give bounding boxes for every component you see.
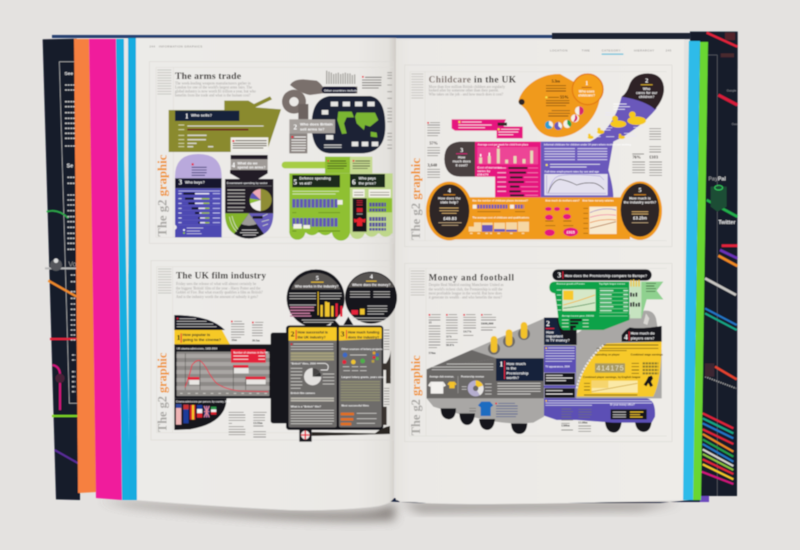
back cover: left side with metro map <box>43 39 80 500</box>
section: how does the Premiership compare to Europe: Average income game, 2003/04 <box>562 315 595 318</box>
top navigation <box>550 49 672 55</box>
section: how important is TV money <box>544 318 655 431</box>
section: defence spending vs aid: Defence spending <box>299 177 331 181</box>
intro: looked after by someone other than their parent. <box>429 89 499 93</box>
section: how much does it cost: much does <box>452 160 471 164</box>
coloured page edges: right green <box>693 42 708 500</box>
section: how popular is going to the cinema: How popular is <box>183 333 210 337</box>
camera body with panels 2 and 3: 2 <box>291 330 295 339</box>
notes around cinema panel <box>229 321 389 437</box>
section: how much do players earn: Combined wage earnings <box>631 352 663 356</box>
vertical label: The g2 graphic <box>409 157 423 240</box>
section: who buys: 3 <box>179 179 183 187</box>
section: state help and industry worth: £915 <box>567 231 575 235</box>
back cover: left side with metro map: See <box>64 71 73 77</box>
section: how much do players earn: players earn? <box>631 336 655 340</box>
section: state help and industry worth: Has the number of childcare places increased? <box>472 200 528 203</box>
camera body with panels 2 and 3: "British" films, 2004 <box>291 362 316 366</box>
section: how much does it cost: Average cost per week for child from place <box>478 143 529 146</box>
intro: benefits from the trade and what is the human cost? <box>175 93 251 97</box>
section: how much do players earn: 414175 <box>596 363 624 372</box>
notes: £4.7% <box>463 329 472 333</box>
section: defence spending vs aid: Who pays <box>359 177 376 181</box>
section: who buys <box>175 154 222 237</box>
section: how much is the Premiership worth: 1 <box>499 360 503 369</box>
section: how popular is going to the cinema <box>174 315 271 430</box>
section: who uses childcare (duck body): 1 <box>585 80 588 87</box>
section: how important is TV money: is TV money? <box>546 338 571 342</box>
side notes: 57% <box>429 140 438 145</box>
back cover: right side with metro map: Goo <box>732 122 738 126</box>
film reels: 5 <box>316 275 319 282</box>
section: how important is TV money: 2 <box>546 319 550 328</box>
section: how popular is going to the cinema: Cinema admissions per person, by country, 2004 <box>176 400 231 403</box>
page header left: 244 INFORMATION GRAPHICS <box>149 45 203 49</box>
camera body with panels 2 and 3 <box>271 325 392 430</box>
film reels: 4 <box>370 274 374 281</box>
intro: Friday sees the release of what will almost certainly be <box>176 282 257 286</box>
back cover: right side with metro map: PayPal <box>708 177 726 183</box>
section: how much does it cost: it cost? <box>455 164 468 168</box>
page edge white gap <box>124 39 130 499</box>
intro: The week-leading weapons manufacturers gather in <box>175 81 251 85</box>
section: who cares for our children: children? <box>639 95 655 99</box>
camera body with panels 2 and 3: Other sources of lottery projects <box>341 347 383 351</box>
notes: £600,000 <box>481 321 494 325</box>
section: who cares for our children: 2 <box>645 78 648 85</box>
panel: arms trade <box>149 45 393 243</box>
intro: it generate its wealth - and who benefits the most? <box>429 296 502 300</box>
section: what do we spend on arms <box>225 155 273 239</box>
section: who does Britain sell arms to <box>282 71 392 153</box>
ribbon callouts <box>452 119 523 138</box>
vertical label: The g2 graphic <box>156 352 170 432</box>
camera body with panels 2 and 3: 3 <box>341 330 345 339</box>
notes <box>429 314 496 355</box>
coloured page edges: orange <box>74 39 97 493</box>
left page <box>136 38 396 510</box>
section: who does Britain sell arms to: 2 <box>293 122 297 131</box>
section: how much is the Premiership worth: Premiership <box>506 371 529 375</box>
back cover: left side with metro map: Se <box>67 163 73 169</box>
section: who cares for our children <box>541 73 664 197</box>
section: who buys: Who buys? <box>185 180 205 184</box>
panel: money and football <box>405 263 672 442</box>
section: state help and industry worth: the industry worth? <box>624 201 656 205</box>
coloured page edges: right blue <box>683 41 700 500</box>
intro: Who takes on the job - and how much does it cost? <box>429 93 504 97</box>
intro: London for one of the world's largest arms fairs. The <box>175 85 252 89</box>
coloured page edges: pink <box>89 39 122 500</box>
side notes <box>427 122 662 177</box>
side notes: 76% <box>632 155 641 160</box>
camera body with panels 2 and 3: How much funding <box>348 331 379 335</box>
section: how popular is going to the cinema: going to the cinema? <box>183 338 222 342</box>
coloured page edges: second blue <box>128 38 137 500</box>
section: who sells <box>169 96 281 152</box>
right page <box>396 40 684 504</box>
section: state help and industry worth: The average cost of childcare and qualifications <box>472 217 530 220</box>
side notes: 3,640 <box>427 162 437 167</box>
section: how much is the Premiership worth <box>428 358 543 397</box>
intro: And is the industry worth the amount of subsidy it gets? <box>176 295 258 299</box>
section: how important is TV money: How <box>546 330 554 334</box>
section: defence spending vs aid: 5 <box>293 177 297 186</box>
section: who uses childcare (duck body) <box>518 74 603 137</box>
section: how much does it cost: How <box>458 156 466 160</box>
intro: More than five million British children are regularly <box>429 85 505 89</box>
intro: global industry is now worth $1 trillion a year, but who <box>175 89 256 94</box>
camera body with panels 2 and 3: the UK industry? <box>298 335 326 339</box>
section: who does Britain sell arms to: sell arms to? <box>300 126 325 131</box>
section: what do we spend on arms: Government spending by sector <box>227 181 267 185</box>
top navigation: LOCATION <box>550 49 568 53</box>
section: who uses childcare (duck body): Who uses <box>579 89 595 93</box>
section: what do we spend on arms: 4 <box>232 161 236 169</box>
title: Childcare in the UK <box>429 75 517 85</box>
section: what do we spend on arms: spend on arms? <box>237 166 266 170</box>
section: how does the Premiership compare to Europe: How does the Premiership compare to Europe? <box>565 274 648 278</box>
section: who cares for our children: Informal childcare for children under 14 years where mothers are working <box>544 143 631 146</box>
intro: most profitable league in the world. But how does <box>429 291 502 295</box>
section: how does the Premiership compare to Europe: Revenue growth of Premier <box>557 283 585 286</box>
vertical label: The g2 graphic <box>156 154 170 237</box>
section: how much does it cost: varies by <box>477 169 491 173</box>
section: how much does it cost: Cost of nurseries <box>477 165 502 169</box>
camera body with panels 2 and 3: Largest lottery grants, years since 2003 <box>341 375 392 379</box>
top navigation: HIERARCHY <box>634 49 655 53</box>
camera body with panels 2 and 3: How successful is <box>298 331 328 335</box>
section: how important is TV money: Or your money office? <box>610 404 635 406</box>
camera body with panels 2 and 3: British film cameos <box>291 391 316 395</box>
section: how popular is going to the cinema: 1 <box>177 333 181 342</box>
intro: the biggest 'British' film of the year - Harry Potter and the <box>176 286 261 290</box>
notes: 15 <box>429 321 432 325</box>
section: how important is TV money: important <box>546 334 564 338</box>
intro: the world's richest club, the Premiership is still the <box>429 287 503 292</box>
section: how much is the Premiership worth: How much <box>506 362 526 366</box>
section: defence spending vs aid: the price? <box>359 181 377 185</box>
notes: 11% <box>446 334 452 338</box>
camera body with panels 2 and 3: What is a "British" film? <box>291 405 321 409</box>
section: who cares for our children: Who <box>643 87 650 91</box>
section: how much do players earn: Combined player earnings, by English league <box>583 375 641 379</box>
section: how much is the Premiership worth: Average club revenue, <box>429 375 454 378</box>
section: defence spending vs aid: 6 <box>352 177 356 186</box>
film reels <box>287 269 397 327</box>
notes: 50.8% <box>446 343 454 347</box>
back cover: left side with metro map: Vo <box>68 262 77 269</box>
camera handle and bottom bar <box>299 350 391 442</box>
section: how much is the Premiership worth: worth? <box>505 376 520 380</box>
section: state help and industry worth: How have nursery salaries <box>582 199 614 202</box>
back cover: right side with metro map: Google <box>727 89 737 93</box>
section: how much do players earn: How much do <box>631 332 655 336</box>
top navigation: CATEGORY <box>602 49 621 53</box>
intro: Despite Real Madrid ousting Manchester United as <box>429 283 504 287</box>
section: state help and industry worth: £49.83 <box>443 216 457 221</box>
notes around cinema panel: 35m <box>231 338 237 342</box>
camera body with panels 2 and 3: does the industry? <box>348 335 379 339</box>
section: state help and industry worth: How does the <box>438 197 461 201</box>
notes around cinema panel: 39.5m <box>252 338 260 342</box>
section: state help and industry worth <box>426 181 662 240</box>
vertical label: The g2 graphic <box>409 355 423 435</box>
section: how important is TV money: TV appearances, 2004 <box>545 366 570 369</box>
section: how does the Premiership compare to Europe <box>549 269 663 330</box>
intro: Goblet of Fire. But what exactly qualifies a film as British? <box>176 291 263 295</box>
side notes: £103 <box>649 155 659 160</box>
panel: the UK film industry <box>151 261 397 442</box>
section: who uses childcare (duck body): childcare? <box>578 93 595 97</box>
section: how much do players earn <box>577 326 663 395</box>
back cover: right side with metro map: Twitter <box>718 220 735 226</box>
section: state help and industry worth: 4 <box>448 188 452 195</box>
section: state help and industry worth: How much is <box>629 197 651 201</box>
section: how does the Premiership compare to Europe: 3 <box>557 271 561 280</box>
boot cleats <box>441 408 652 434</box>
title: Money and football <box>429 273 514 283</box>
section: how much do players earn: Spending on player <box>595 352 620 356</box>
section: how important is TV money: £300m <box>561 424 570 428</box>
section: who uses childcare (duck body): 5.3m <box>552 79 561 84</box>
section: what do we spend on arms: What do we <box>237 161 258 165</box>
back cover: right side with metro map <box>690 32 738 496</box>
notes: 570m <box>429 351 436 355</box>
camera body with panels 2 and 3: Most successful films <box>341 404 369 408</box>
football shirt and stud callouts <box>469 402 518 417</box>
section: how much does it cost: 3 <box>460 147 463 154</box>
panel: childcare in the UK <box>405 49 672 247</box>
section: how much do players earn: 4 <box>624 332 628 341</box>
section: state help and industry worth: state help? <box>440 201 459 205</box>
section: how much is the Premiership worth: Premiership revenue <box>461 376 485 378</box>
top navigation: TIME <box>582 49 590 53</box>
section: how popular is going to the cinema: UK cinema admissions, 1933-2004 <box>177 348 218 351</box>
book spine edge and top of cover <box>52 33 709 503</box>
section: state help and industry worth: 5 <box>638 187 642 194</box>
section: how much does it cost <box>444 142 541 197</box>
section: who sells: Who sells? <box>191 112 213 117</box>
top navigation: 245 <box>666 49 672 53</box>
section: defence spending vs aid: vs aid? <box>299 181 313 185</box>
title: The UK film industry <box>176 271 266 281</box>
notes around cinema panel: £3.55m <box>253 421 263 425</box>
section: how popular is going to the cinema: Number of cinemas in the UK <box>233 352 268 355</box>
section: how does the Premiership compare to Europe: Top-flight league revenue <box>599 283 626 286</box>
section: how much is the Premiership worth: is the <box>506 367 516 371</box>
book shadow <box>100 500 680 521</box>
section: who does Britain sell arms to: Who does Britain <box>300 121 333 126</box>
section: who does Britain sell arms to: Other countries include <box>324 88 358 92</box>
section: who cares for our children: Full-time employment rates by sex and age <box>545 169 600 173</box>
section: who cares for our children: cares for our <box>636 91 658 95</box>
section: who uses childcare (duck body): 55% <box>560 94 569 99</box>
football boot body <box>427 311 662 423</box>
section: how much does it cost: £58-£74 <box>477 173 489 177</box>
film reels: Who works in the industry? <box>295 284 338 288</box>
film reels: Where does the money? <box>352 283 391 287</box>
section: defence spending vs aid <box>282 157 393 241</box>
section: state help and industry worth: How much do mothers earn? <box>545 199 580 202</box>
title: The arms trade <box>175 71 242 82</box>
section: state help and industry worth: £3.2bn <box>633 215 647 220</box>
section: how important is TV money: £1.08m <box>578 420 588 424</box>
section: who sells: 1 <box>185 112 189 120</box>
coloured page edges: left blue <box>116 39 130 500</box>
